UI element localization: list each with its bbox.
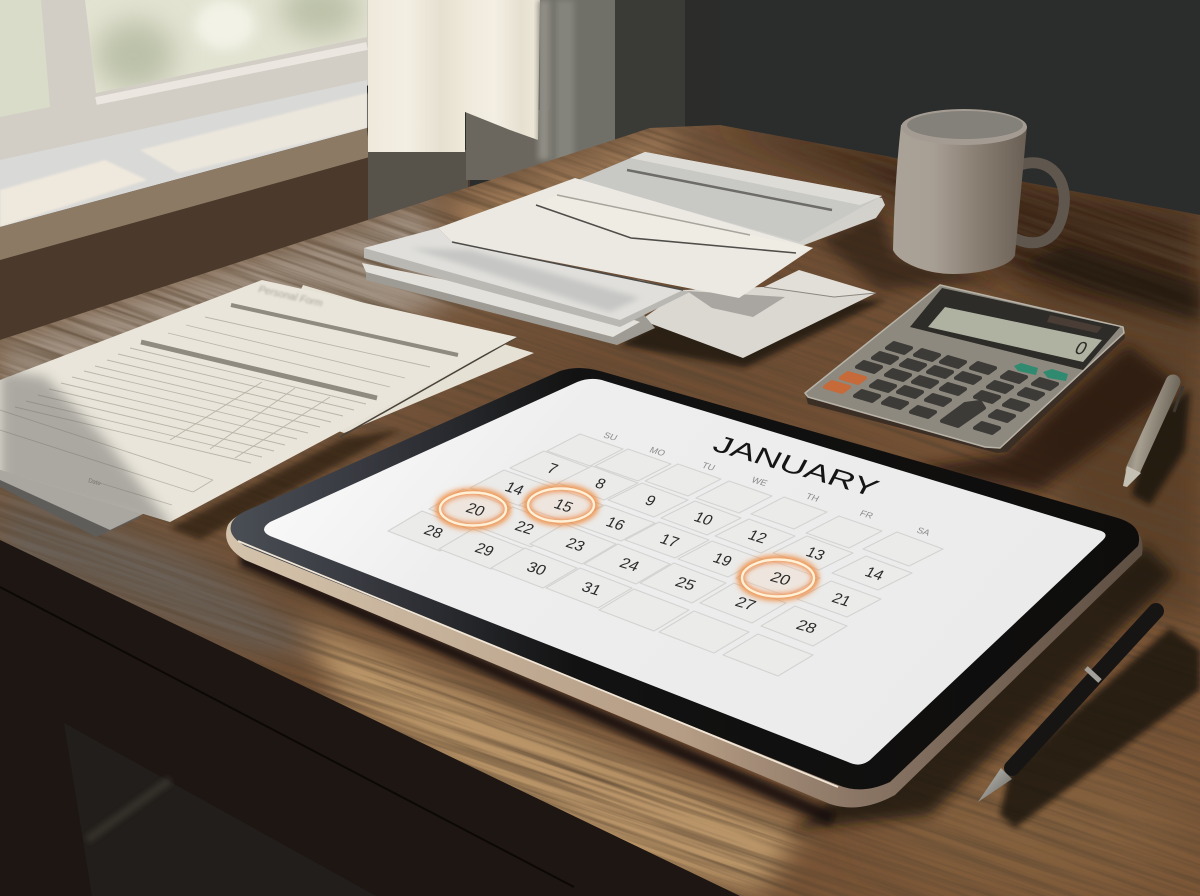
lower right envelope xyxy=(641,270,876,358)
calendar dates: 12 xyxy=(745,527,770,547)
calendar dates: 28 xyxy=(421,522,446,542)
right glass pane xyxy=(85,0,370,100)
frame highlight xyxy=(96,46,367,101)
calendar dates: 15 xyxy=(551,496,576,516)
mug rim xyxy=(901,109,1027,145)
calendar dates: 31 xyxy=(578,580,604,599)
tablet bezel xyxy=(231,368,1139,789)
coffee mug xyxy=(893,109,1064,274)
calendar dates: 8 xyxy=(592,476,609,493)
calendar dates: 29 xyxy=(472,540,497,560)
LCD digit: 0 xyxy=(1071,337,1091,359)
calendar dates: 23 xyxy=(563,535,588,555)
calendar dates: 7 xyxy=(544,461,561,478)
weekday labels: MO xyxy=(648,445,667,458)
calculator base edge xyxy=(805,285,1125,453)
form lines xyxy=(0,317,430,505)
calendar dates: 27 xyxy=(732,594,759,614)
weekday labels: TH xyxy=(804,492,821,503)
orange keys xyxy=(825,373,865,392)
paper forms xyxy=(0,280,534,537)
highlight ring: second 20 xyxy=(741,559,815,597)
calendar dates: 17 xyxy=(657,531,682,551)
stack of forms behind envelopes xyxy=(560,152,885,247)
solar strip xyxy=(1047,315,1102,333)
form header bars xyxy=(141,305,458,398)
form bar xyxy=(627,170,832,210)
calendar dates: 13 xyxy=(803,544,828,564)
form title: Personal Form xyxy=(257,284,324,310)
calendar cells xyxy=(388,434,943,676)
calendar dates: 14 xyxy=(502,479,527,499)
shadow across the form xyxy=(0,370,175,530)
calendar dates: 14 xyxy=(862,564,887,584)
dark display panel xyxy=(910,288,1120,370)
sill front xyxy=(0,128,370,262)
cast shadows on table xyxy=(170,210,1200,830)
calendar dates: 22 xyxy=(512,518,537,538)
weekday labels: SA xyxy=(915,526,933,538)
sheer curtain xyxy=(368,0,550,245)
green keys xyxy=(1014,363,1068,381)
left glass pane xyxy=(0,0,50,117)
weekday labels: SU xyxy=(602,430,619,443)
silver pen xyxy=(1123,382,1183,487)
calendar dates: 20 xyxy=(463,500,488,520)
second sheet xyxy=(250,285,534,433)
calculator xyxy=(805,285,1125,453)
sill xyxy=(0,80,367,227)
highlight ring: first 20 xyxy=(439,492,507,526)
calendar dates: 19 xyxy=(710,550,735,570)
tablet screen xyxy=(264,379,1106,765)
calendar dates: 30 xyxy=(523,560,549,579)
tablet metal edge xyxy=(226,368,1143,807)
mug body xyxy=(893,125,1027,274)
top form sheet xyxy=(0,280,517,522)
bottom paper stack xyxy=(0,477,141,537)
desk front and legs xyxy=(0,540,740,896)
window with frame and sill xyxy=(0,0,470,345)
calendar title: JANUARY xyxy=(708,430,884,502)
opening under the desk xyxy=(64,723,376,896)
left stack of papers xyxy=(362,228,690,345)
signature label: Date xyxy=(87,478,102,487)
highlight ring: 15 xyxy=(527,488,595,522)
wall below sill xyxy=(0,157,470,345)
calendar dates: 21 xyxy=(829,590,854,610)
calendar dates xyxy=(421,461,887,637)
calendar dates: 20 xyxy=(767,569,794,589)
curtain panels on the right of the window xyxy=(540,0,720,170)
envelope flap xyxy=(536,195,813,253)
calendar dates: 16 xyxy=(603,514,628,534)
calculator body xyxy=(805,285,1124,448)
calendar dates: 28 xyxy=(793,617,820,637)
weekday labels: TU xyxy=(700,461,717,472)
weekday labels xyxy=(602,430,933,538)
calendar dates: 9 xyxy=(642,493,659,510)
weekday labels: WE xyxy=(750,475,769,488)
top envelope with flap xyxy=(438,178,813,298)
calendar dates: 10 xyxy=(691,509,716,529)
weekday labels: FR xyxy=(858,509,875,521)
window frame xyxy=(0,0,370,165)
calendar dates: 24 xyxy=(616,556,642,575)
tablet xyxy=(226,368,1143,807)
black pen xyxy=(978,611,1156,802)
calendar dates: 25 xyxy=(672,574,699,594)
LCD display xyxy=(928,307,1102,362)
calculator keys xyxy=(855,343,1057,433)
mug handle xyxy=(1014,163,1064,243)
